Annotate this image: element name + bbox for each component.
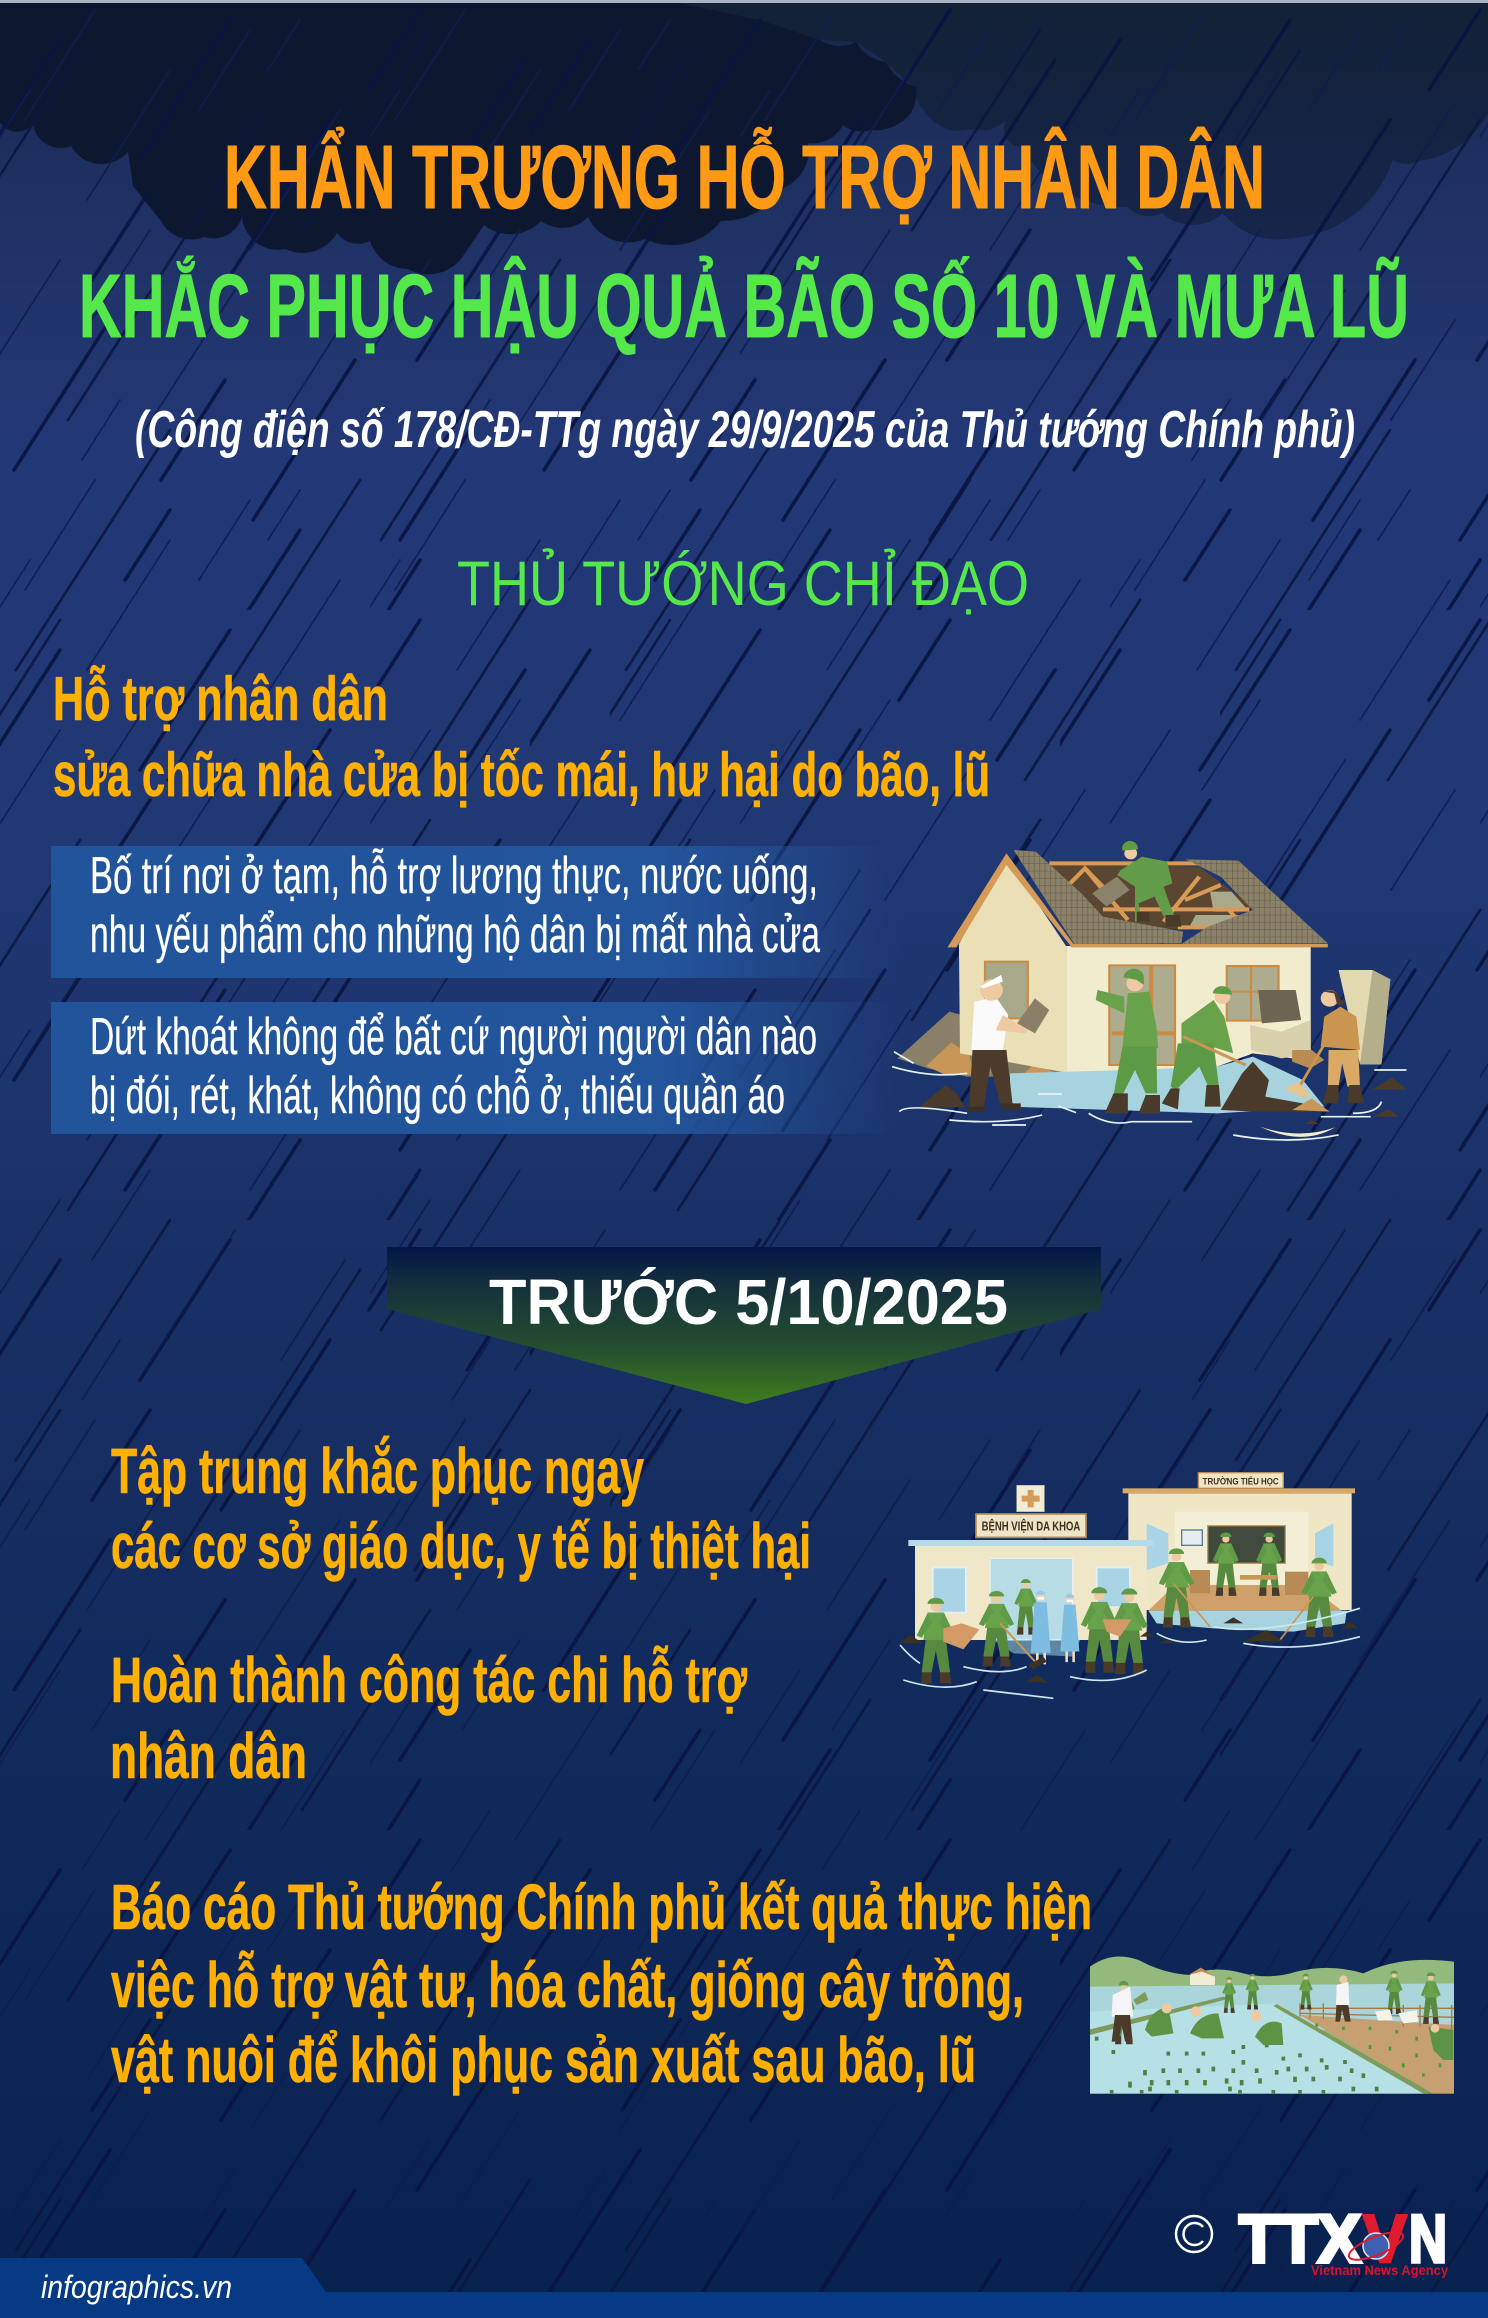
task: report to Prime Minister <box>111 1871 1092 2096</box>
task: complete support: Hoàn thành công tác chi hỗ trợ <box>111 1644 747 1716</box>
task: repair schools and clinics: các cơ sở giáo dục, y tế bị thiệt hại <box>111 1510 811 1582</box>
directive heading: sửa chữa nhà cửa bị tốc mái, hư hại do bão, lũ <box>53 741 990 810</box>
panel: no one left hungry <box>51 1002 901 1134</box>
task: complete support <box>110 1644 747 1792</box>
TTXVN logo: V <box>1363 2201 1407 2277</box>
illustration: hospital and school: BỆNH VIỆN DA KHOA <box>982 1519 1080 1534</box>
cloud: right <box>660 0 1488 240</box>
panel: temporary shelter: Bố trí nơi ở tạm, hỗ trợ lương thực, nước uống, <box>90 847 818 905</box>
copyright symbol <box>1176 2216 1212 2252</box>
TTXVN logo: N <box>1409 2201 1447 2277</box>
panel: temporary shelter <box>51 846 901 978</box>
section heading: THỦ TƯỚNG CHỈ ĐẠO <box>457 548 1029 619</box>
task: report to Prime Minister: việc hỗ trợ vật tư, hóa chất, giống cây trồng, <box>111 1949 1024 2021</box>
TTXVN logo <box>1239 2201 1448 2278</box>
task: report to Prime Minister: vật nuôi để khôi phục sản xuất sau bão, lũ <box>111 2024 976 2096</box>
illustration: house repair <box>892 841 1406 1140</box>
TTXVN logo: Vietnam News Agency <box>1311 2263 1448 2278</box>
illustration: hospital and school <box>900 1473 1360 1698</box>
panel: no one left hungry: Dứt khoát không để bất cứ người người dân nào <box>90 1008 817 1066</box>
task: complete support: nhân dân <box>110 1720 307 1792</box>
illustration: rice field <box>1090 1957 1454 2094</box>
task: repair schools and clinics: Tập trung khắc phục ngay <box>111 1435 644 1507</box>
TTXVN logo: TTX <box>1239 2201 1361 2277</box>
footer band <box>0 2258 1488 2318</box>
cloud: left <box>0 0 916 274</box>
illustration: hospital and school: TRƯỜNG TIỂU HỌC <box>1203 1476 1279 1487</box>
panel: no one left hungry: bị đói, rét, khát, không có chỗ ở, thiếu quần áo <box>90 1067 785 1125</box>
date banner: TRƯỚC 5/10/2025 <box>489 1266 1008 1338</box>
top strip <box>0 0 1488 3</box>
directive heading <box>53 665 990 810</box>
website label: infographics.vn <box>41 2269 232 2305</box>
date banner <box>387 1247 1101 1404</box>
panel: temporary shelter: nhu yếu phẩm cho những hộ dân bị mất nhà cửa <box>90 906 820 964</box>
task: repair schools and clinics <box>111 1435 811 1582</box>
directive heading: Hỗ trợ nhân dân <box>53 665 388 734</box>
